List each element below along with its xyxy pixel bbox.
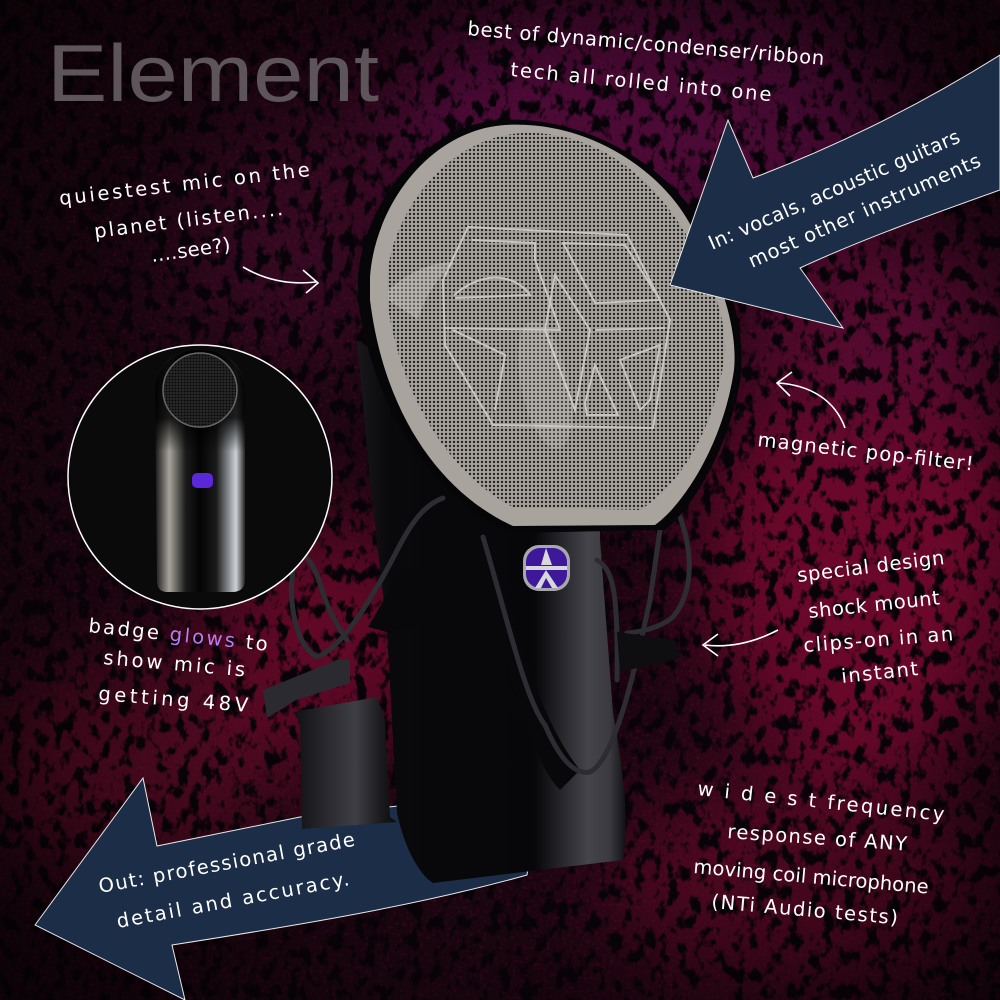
arrow: pop filter pointer xyxy=(777,372,845,428)
note: shock mount: instant xyxy=(840,657,919,688)
note: quietest: planet (listen.... xyxy=(93,197,284,243)
pop filter rim xyxy=(358,120,742,533)
body shade between cables xyxy=(480,560,580,790)
note: input arrow: most other instruments xyxy=(745,149,984,273)
logo on mesh xyxy=(443,227,670,428)
inset mic xyxy=(155,350,245,592)
note: quietest xyxy=(58,158,311,267)
microphone xyxy=(263,120,742,883)
note: badge xyxy=(87,614,269,717)
inset grille xyxy=(163,353,237,427)
note: pop filter: magnetic pop-filter! xyxy=(756,428,975,476)
mic body xyxy=(357,340,626,883)
arrow: shock mount pointer xyxy=(703,630,778,656)
note: output arrow xyxy=(97,828,357,933)
note: shock mount: shock mount xyxy=(807,586,941,623)
inset badge xyxy=(192,473,213,488)
shock mount wing xyxy=(368,567,537,732)
note: tech: best of dynamic/condenser/ribbon xyxy=(467,17,825,70)
note: badge: badge glows to xyxy=(87,614,269,656)
title: Element xyxy=(47,29,379,119)
note: frequency: w i d e s t frequency xyxy=(696,777,946,826)
pop filter mesh xyxy=(387,133,725,510)
shock mount cables xyxy=(291,498,689,772)
note: shock mount: special design xyxy=(796,546,946,587)
note: shock mount: clips-on in an xyxy=(803,622,954,657)
note: output arrow: detail and accuracy. xyxy=(115,867,351,933)
note: frequency: (NTi Audio tests) xyxy=(711,890,899,929)
badge xyxy=(523,545,570,591)
arrow: input xyxy=(670,55,1000,328)
note: tech xyxy=(467,17,825,106)
arrow: quiet pointer xyxy=(243,267,318,293)
note: input arrow: In: vocals, acoustic guitars xyxy=(705,125,963,255)
inset circle xyxy=(68,345,332,609)
note: frequency xyxy=(693,777,946,929)
clip right xyxy=(617,632,681,672)
note: frequency: moving coil microphone xyxy=(693,855,930,899)
note: shock mount xyxy=(796,546,954,688)
note: badge: getting 48V xyxy=(98,682,250,717)
mesh reflection xyxy=(388,262,455,320)
pop filter frame xyxy=(370,125,735,526)
note: quietest: ....see?) xyxy=(149,233,232,267)
clamp column xyxy=(293,697,397,829)
note: badge: show mic is xyxy=(103,646,246,681)
clamp bar xyxy=(263,660,350,718)
arrow: output xyxy=(35,778,540,1000)
note: output arrow: Out: professional grade xyxy=(97,828,357,898)
mic reflection xyxy=(508,316,582,454)
note: frequency: response of ANY xyxy=(727,820,908,856)
note: quietest: quiestest mic on the xyxy=(58,158,311,210)
note: tech: tech all rolled into one xyxy=(510,58,773,106)
